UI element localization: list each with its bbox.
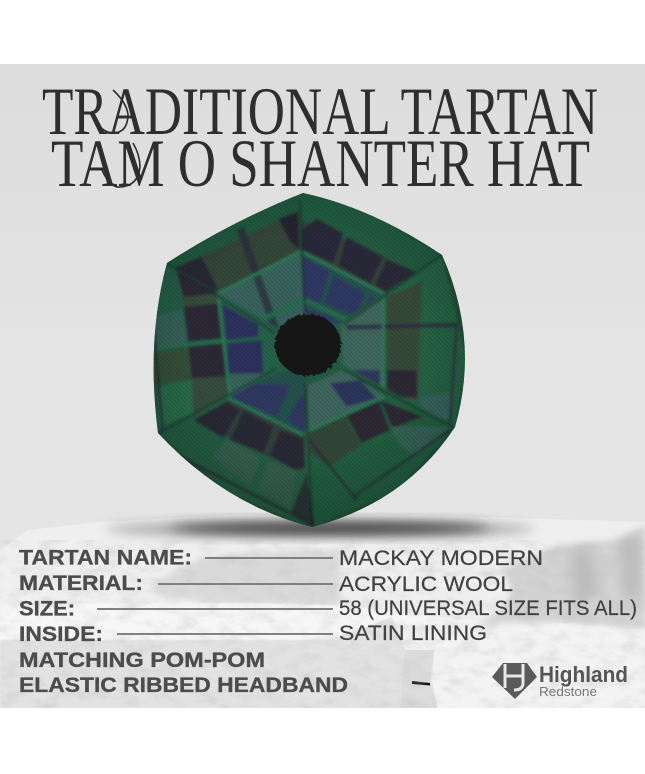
panel: bottom left: [159, 362, 315, 526]
feature: pom-pom: MATCHING POM-POM: [19, 649, 265, 672]
spec list: [19, 546, 637, 697]
panel: right: [334, 256, 465, 428]
icon: diamond monogram: [492, 663, 537, 699]
fabric base: [154, 193, 465, 527]
panel: bottom right: [306, 362, 450, 526]
stone: lower face: [0, 617, 410, 708]
spec: tartan name: [19, 546, 543, 570]
fabric texture: [154, 193, 465, 526]
icon: pom-pom: [275, 314, 341, 376]
feature: headband: ELASTIC RIBBED HEADBAND: [19, 674, 348, 697]
spec: inside: SATIN LINING: [339, 622, 487, 645]
tartan panels: [150, 193, 467, 528]
spec: inside: [19, 622, 487, 646]
spec: material: ACRYLIC WOOL: [339, 573, 513, 596]
tartan hat: [154, 193, 465, 527]
fabric shading: [154, 193, 465, 527]
stone: gap mark: [412, 681, 430, 686]
stone: right shadow: [570, 535, 640, 610]
panel: left: [154, 264, 280, 432]
panel: top left: [167, 194, 306, 330]
logo: Highland Redstone: [492, 662, 628, 699]
panel creases: [158, 200, 455, 528]
logo: Highland Redstone: Redstone: [539, 684, 597, 699]
clear lower edge: [0, 708, 645, 774]
stone: lower right: [431, 623, 645, 708]
spec: inside: INSIDE:: [19, 623, 103, 646]
stone: upper slab face: [150, 550, 340, 606]
spec: material: MATERIAL:: [19, 572, 143, 595]
hat shadow: [105, 522, 535, 535]
stone: right face: [480, 525, 645, 628]
title: [42, 73, 598, 201]
spec: tartan name: MACKAY MODERN: [339, 547, 543, 570]
stone: upper slab: [0, 515, 645, 708]
spec: size: 58 (UNIVERSAL SIZE FITS ALL): [339, 597, 637, 620]
spec: tartan name: TARTAN NAME:: [19, 546, 192, 570]
spec: material: [19, 572, 513, 596]
stone: gap: [400, 650, 437, 708]
spec: size: [19, 597, 637, 620]
logo: Highland Redstone: Highland: [539, 662, 628, 687]
stone platform: [0, 515, 645, 774]
stone: texture: [0, 540, 645, 708]
panel: top right: [298, 193, 441, 326]
stone: ledge: [0, 603, 480, 640]
spec: size: SIZE:: [19, 598, 75, 620]
